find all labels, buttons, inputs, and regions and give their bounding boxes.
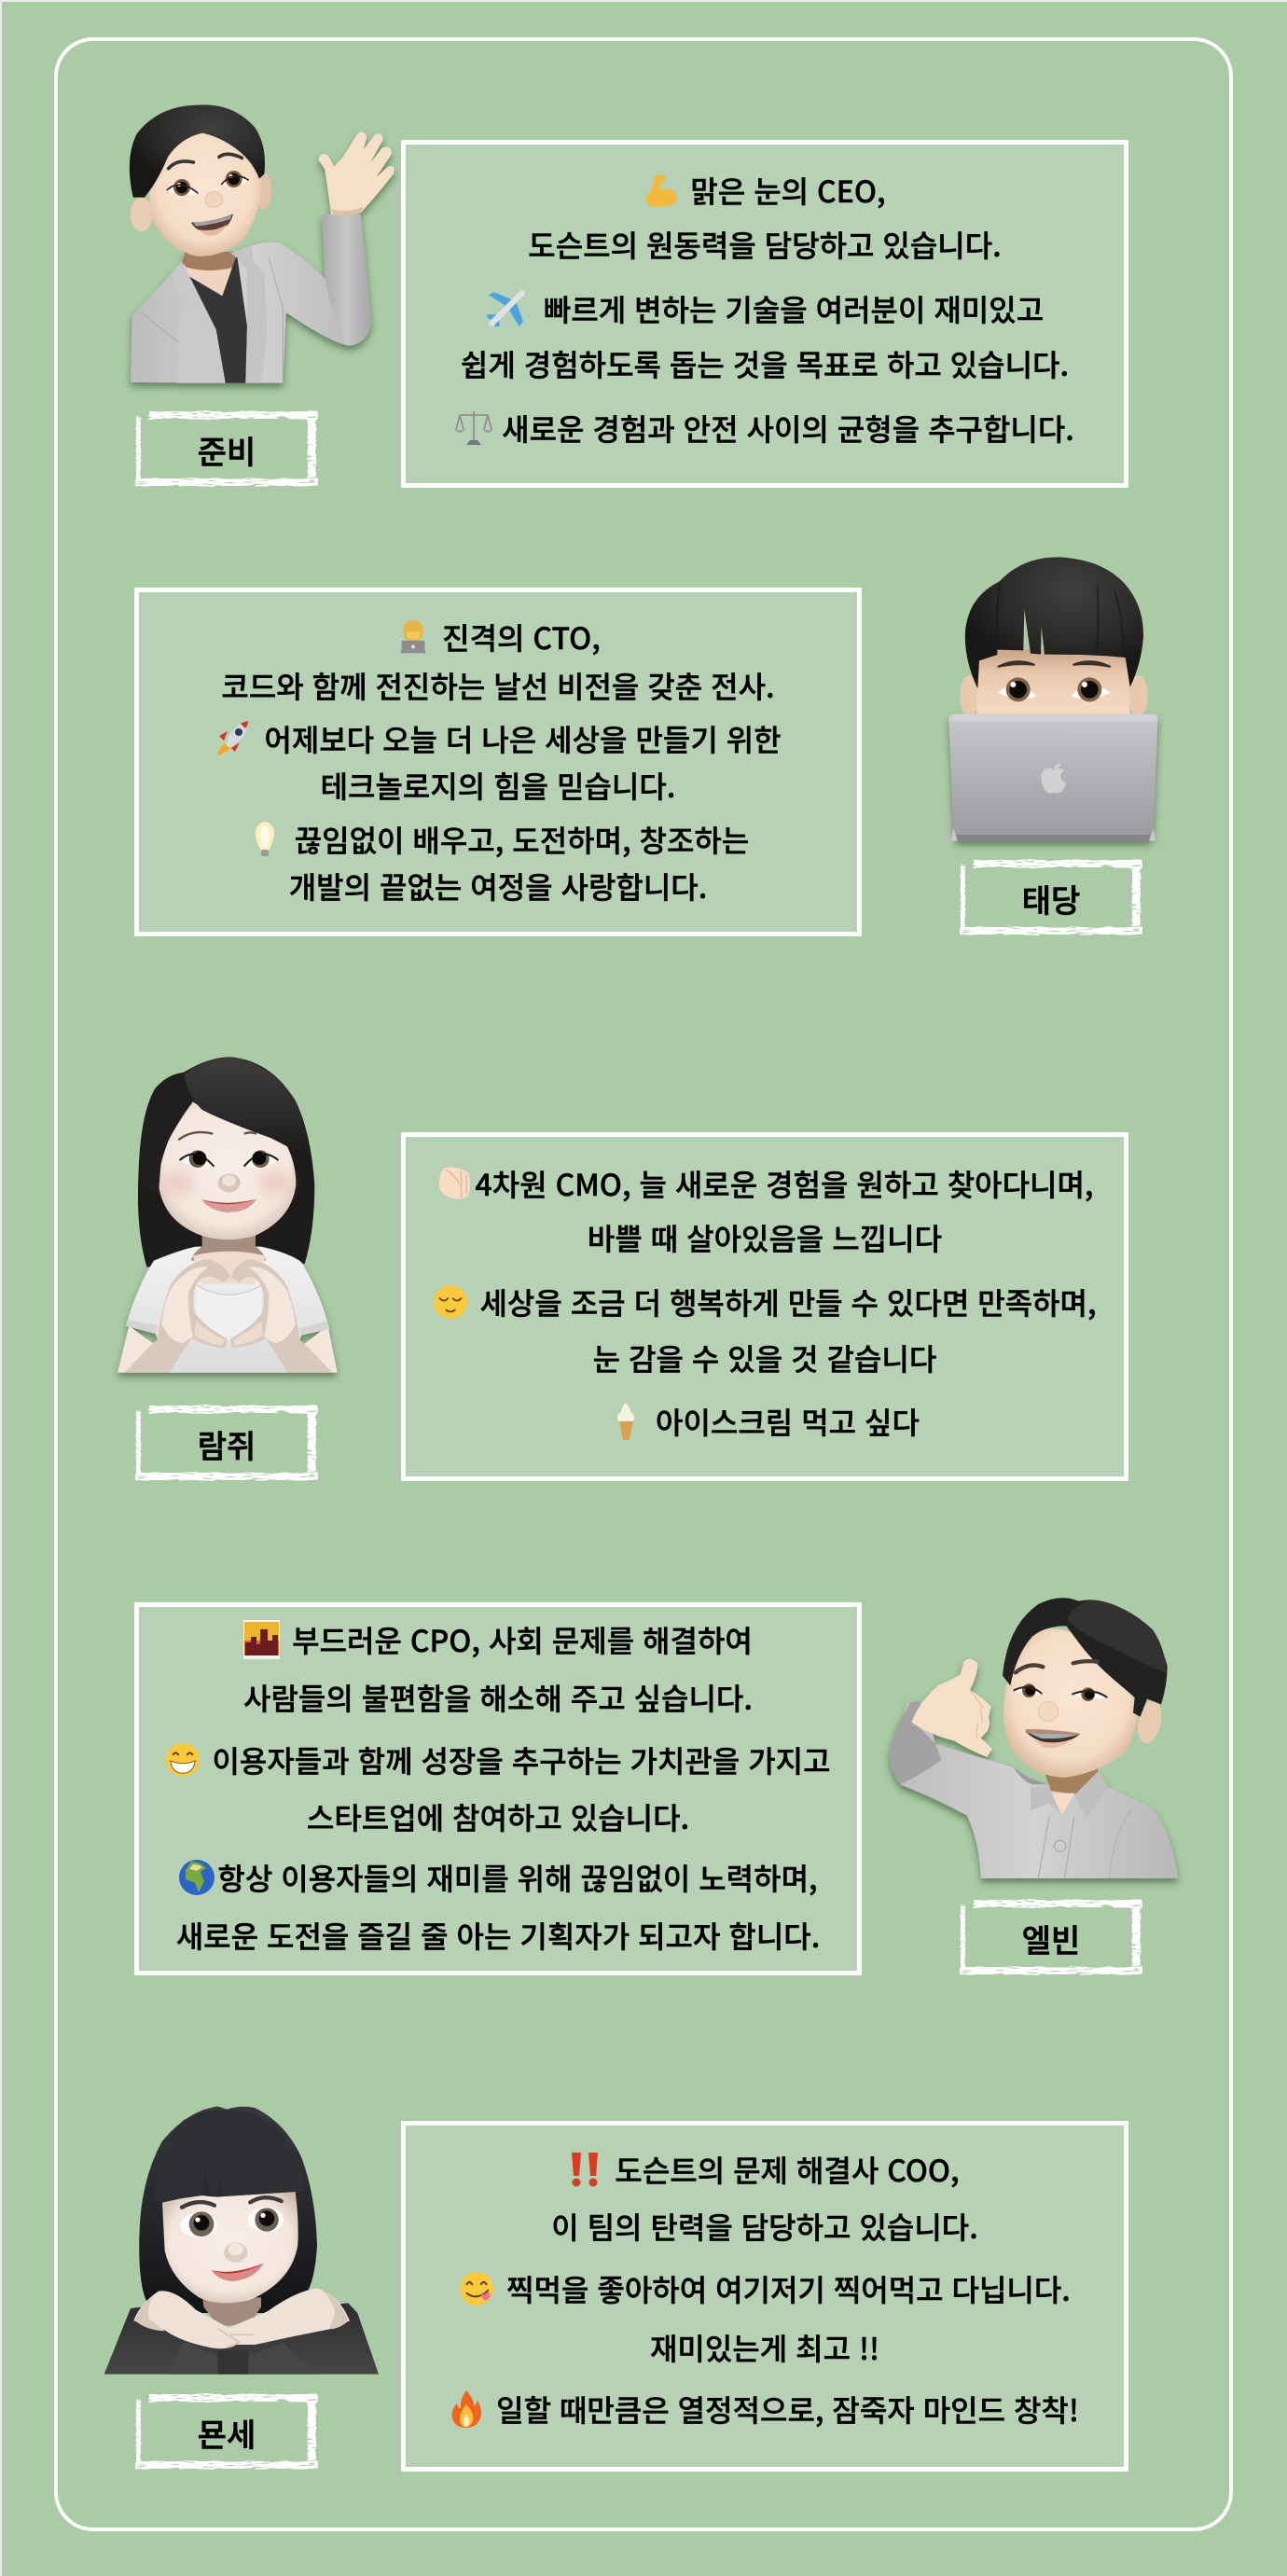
text line: 쉽게 경험하도록 돕는 것을 목표로 하고 있습니다. (461, 342, 1069, 385)
eyes (1014, 1687, 1107, 1698)
eyes (167, 176, 249, 195)
icon: globe (179, 1860, 214, 1895)
icon: rocket (217, 721, 248, 755)
nose (218, 1173, 241, 1192)
name tag: 준비 (135, 410, 318, 487)
name tag: 묜세: 묜세 (198, 2410, 256, 2456)
text line: 코드와 함께 전진하는 날선 비전을 갖춘 전사. (221, 664, 775, 707)
mouth (201, 1199, 256, 1212)
panel: 람쥐 introduction (401, 1132, 1128, 1481)
avatar: 태당 behind laptop (948, 557, 1157, 841)
back hair (139, 2106, 317, 2313)
face (976, 650, 1129, 716)
neck (182, 252, 238, 296)
eyes (180, 1155, 278, 1167)
brows (169, 154, 242, 169)
face (159, 1101, 296, 1240)
text line: 스타트업에 참여하고 있습니다. (307, 1795, 689, 1838)
text line: 맑은 눈의 CEO, (690, 169, 886, 212)
hands: right (230, 1259, 332, 1373)
text line: 어제보다 오늘 더 나은 세상을 만들기 위한 (264, 717, 782, 760)
bangs (156, 2111, 305, 2202)
jacket (104, 2303, 379, 2375)
panel: 엘빈 introduction (134, 1602, 862, 1975)
icon: grinning face (166, 1743, 200, 1777)
text line: 바쁠 때 살아있음을 느낍니다 (588, 1216, 942, 1259)
name tag: 태당 (960, 859, 1142, 935)
text line: 이용자들과 함께 성장을 추구하는 가치관을 가지고 (212, 1738, 831, 1781)
text line: 새로운 도전을 즐길 줄 아는 기획자가 되고자 합니다. (176, 1914, 820, 1957)
text line: 도슨트의 문제 해결사 COO, (615, 2148, 960, 2191)
jacket body and raised arm (131, 215, 371, 383)
icon: savoring face (460, 2272, 493, 2306)
t-shirt (126, 1247, 329, 1373)
inner shirt (189, 255, 247, 383)
blush (163, 1171, 194, 1195)
avatar: 엘빈 call-me gesture (889, 1598, 1178, 1878)
name tag: 엘빈: 엘빈 (1022, 1916, 1080, 1961)
hair (130, 104, 265, 198)
text line: 재미있는게 최고 !! (650, 2326, 879, 2369)
panel: 준비 introduction (401, 140, 1128, 488)
eyes (998, 686, 1111, 699)
text line: 테크놀로지의 힘을 믿습니다. (321, 764, 675, 807)
text line: 이 팀의 탄력을 담당하고 있습니다. (551, 2205, 978, 2248)
hair (1003, 1598, 1168, 1717)
nose (205, 192, 223, 207)
icon: light bulb (256, 822, 274, 856)
text line: 도슨트의 원동력을 담당하고 있습니다. (528, 223, 1002, 266)
hands: left (125, 1259, 230, 1373)
nose (224, 2242, 247, 2263)
text line: 찍먹을 좋아하여 여기저기 찍어먹고 다닙니다. (506, 2267, 1071, 2310)
back hair (138, 1057, 314, 1267)
text line: 세상을 조금 더 행복하게 만들 수 있다면 만족하며, (479, 1281, 1097, 1323)
text line: 눈 감을 수 있을 것 같습니다 (593, 1336, 936, 1379)
avatar: 준비 waving (130, 104, 394, 383)
icon: technologist (401, 620, 425, 653)
sleeve cuff (889, 1700, 941, 1784)
icon: cityscape at dusk (243, 1620, 280, 1659)
icon: fire (451, 2390, 481, 2428)
text line: 사람들의 불편함을 해소해 주고 싶습니다. (243, 1676, 753, 1719)
text line: 아이스크림 먹고 싶다 (656, 1400, 920, 1443)
name tag: 묜세 (135, 2393, 318, 2470)
text line: 4차원 CMO, 늘 새로운 경험을 원하고 찾아다니며, (476, 1162, 1093, 1205)
text line: 끊임없이 배우고, 도전하며, 창조하는 (295, 818, 749, 861)
text line: 개발의 끝없는 여정을 사랑합니다. (289, 865, 707, 907)
apple logo (1042, 763, 1066, 794)
text line: 항상 이용자들의 재미를 위해 끊임없이 노력하며, (217, 1856, 818, 1899)
icon: airplane (487, 290, 525, 326)
text line: 진격의 CTO, (442, 616, 601, 658)
eyes (180, 2213, 217, 2237)
fringe hair (184, 1058, 311, 1159)
brows (1016, 1661, 1098, 1672)
shirt body (889, 1700, 1178, 1878)
ear (1134, 1698, 1165, 1745)
text line: 새로운 경험과 안전 사이의 균형을 추구합니다. (502, 407, 1074, 450)
icon: fist (438, 1168, 470, 1199)
name tag: 람쥐 (135, 1405, 318, 1481)
ears (960, 675, 978, 717)
name tag: 람쥐: 람쥐 (198, 1421, 256, 1467)
name tag: 준비: 준비 (198, 427, 256, 473)
icon: relieved face (433, 1285, 468, 1319)
name tag: 엘빈 (960, 1899, 1142, 1975)
hair (965, 557, 1143, 688)
icon: flexed biceps (645, 174, 677, 207)
text line: 부드러운 CPO, 사회 문제를 해결하여 (292, 1618, 753, 1661)
panel: 태당 introduction (134, 588, 862, 936)
neck (191, 1231, 266, 1261)
face (149, 131, 261, 256)
name tag: 태당: 태당 (1022, 876, 1080, 921)
ears (131, 198, 153, 231)
button (1055, 1840, 1066, 1851)
icon: double exclamation (572, 2153, 598, 2186)
mouth (191, 214, 233, 233)
lapels (173, 266, 226, 383)
panel: 묜세 introduction (401, 2121, 1128, 2472)
face (162, 2192, 298, 2303)
neck (202, 2297, 261, 2325)
brows (999, 661, 1110, 667)
mouth (212, 2264, 264, 2281)
neck (1045, 1767, 1101, 1794)
brows (182, 2197, 282, 2208)
hand (911, 1659, 992, 1757)
hand (319, 132, 394, 215)
avatar: 람쥐 heart hands (118, 1057, 338, 1373)
face (1003, 1629, 1137, 1778)
hands (133, 2291, 240, 2348)
text line: 빠르게 변하는 기술을 여러분이 재미있고 (544, 287, 1044, 330)
avatar: 묜세 chin on hands (104, 2106, 379, 2375)
laptop lid (948, 714, 1157, 841)
forearms (118, 1326, 338, 1373)
nose (1038, 1701, 1059, 1722)
icon: balance scale (455, 411, 492, 445)
mouth (1025, 1731, 1080, 1744)
brows (179, 1132, 256, 1140)
text line: 일할 때만큼은 열정적으로, 잠죽자 마인드 창착! (496, 2388, 1079, 2431)
icon: soft ice cream (617, 1403, 634, 1440)
collar (1031, 1770, 1108, 1819)
